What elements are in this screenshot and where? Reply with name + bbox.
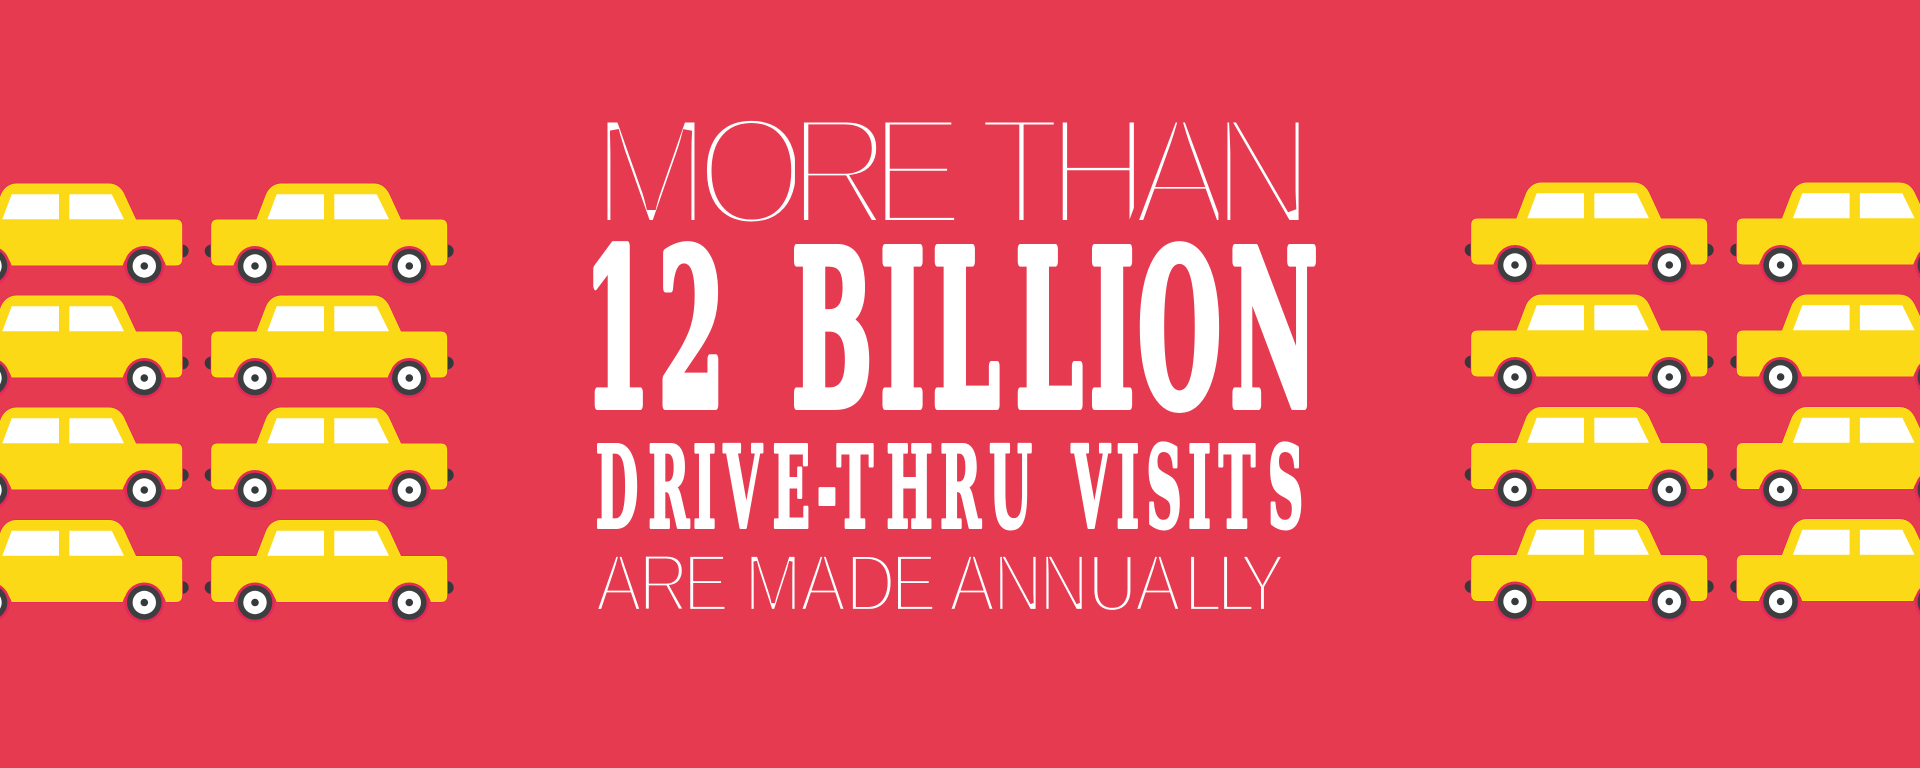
car: left column 2 row 4: [205, 520, 454, 622]
car: right column 1 row 2: [1465, 295, 1714, 397]
car: right column 2 row 4: [1730, 520, 1920, 622]
car: right column 1 row 1: [1465, 183, 1714, 285]
car: right column 2 row 2: [1730, 295, 1920, 397]
heading line: MORE THAN: MORE THAN: [591, 83, 1315, 258]
car: left column 1 row 4: [0, 520, 189, 622]
right group of yellow cars: [1465, 183, 1920, 622]
car: right column 2 row 1: [1730, 183, 1920, 285]
car: left column 2 row 1: [205, 184, 454, 286]
car: left column 2 row 3: [205, 408, 454, 510]
car: left column 1 row 1: [0, 184, 189, 286]
car: left column 1 row 2: [0, 296, 189, 398]
car: right column 2 row 3: [1730, 408, 1920, 510]
headline block: [584, 83, 1318, 629]
heading line: DRIVE-THRU VISITS: DRIVE-THRU VISITS: [596, 423, 1303, 554]
car: left column 1 row 3: [0, 408, 189, 510]
heading line: ARE MADE ANNUALLY: ARE MADE ANNUALLY: [596, 538, 1286, 629]
car: right column 1 row 3: [1465, 408, 1714, 510]
left group of yellow cars: [0, 184, 454, 622]
heading line: 12 BILLION: 12 BILLION: [584, 205, 1318, 457]
car: right column 1 row 4: [1465, 520, 1714, 622]
car: left column 2 row 2: [205, 296, 454, 398]
